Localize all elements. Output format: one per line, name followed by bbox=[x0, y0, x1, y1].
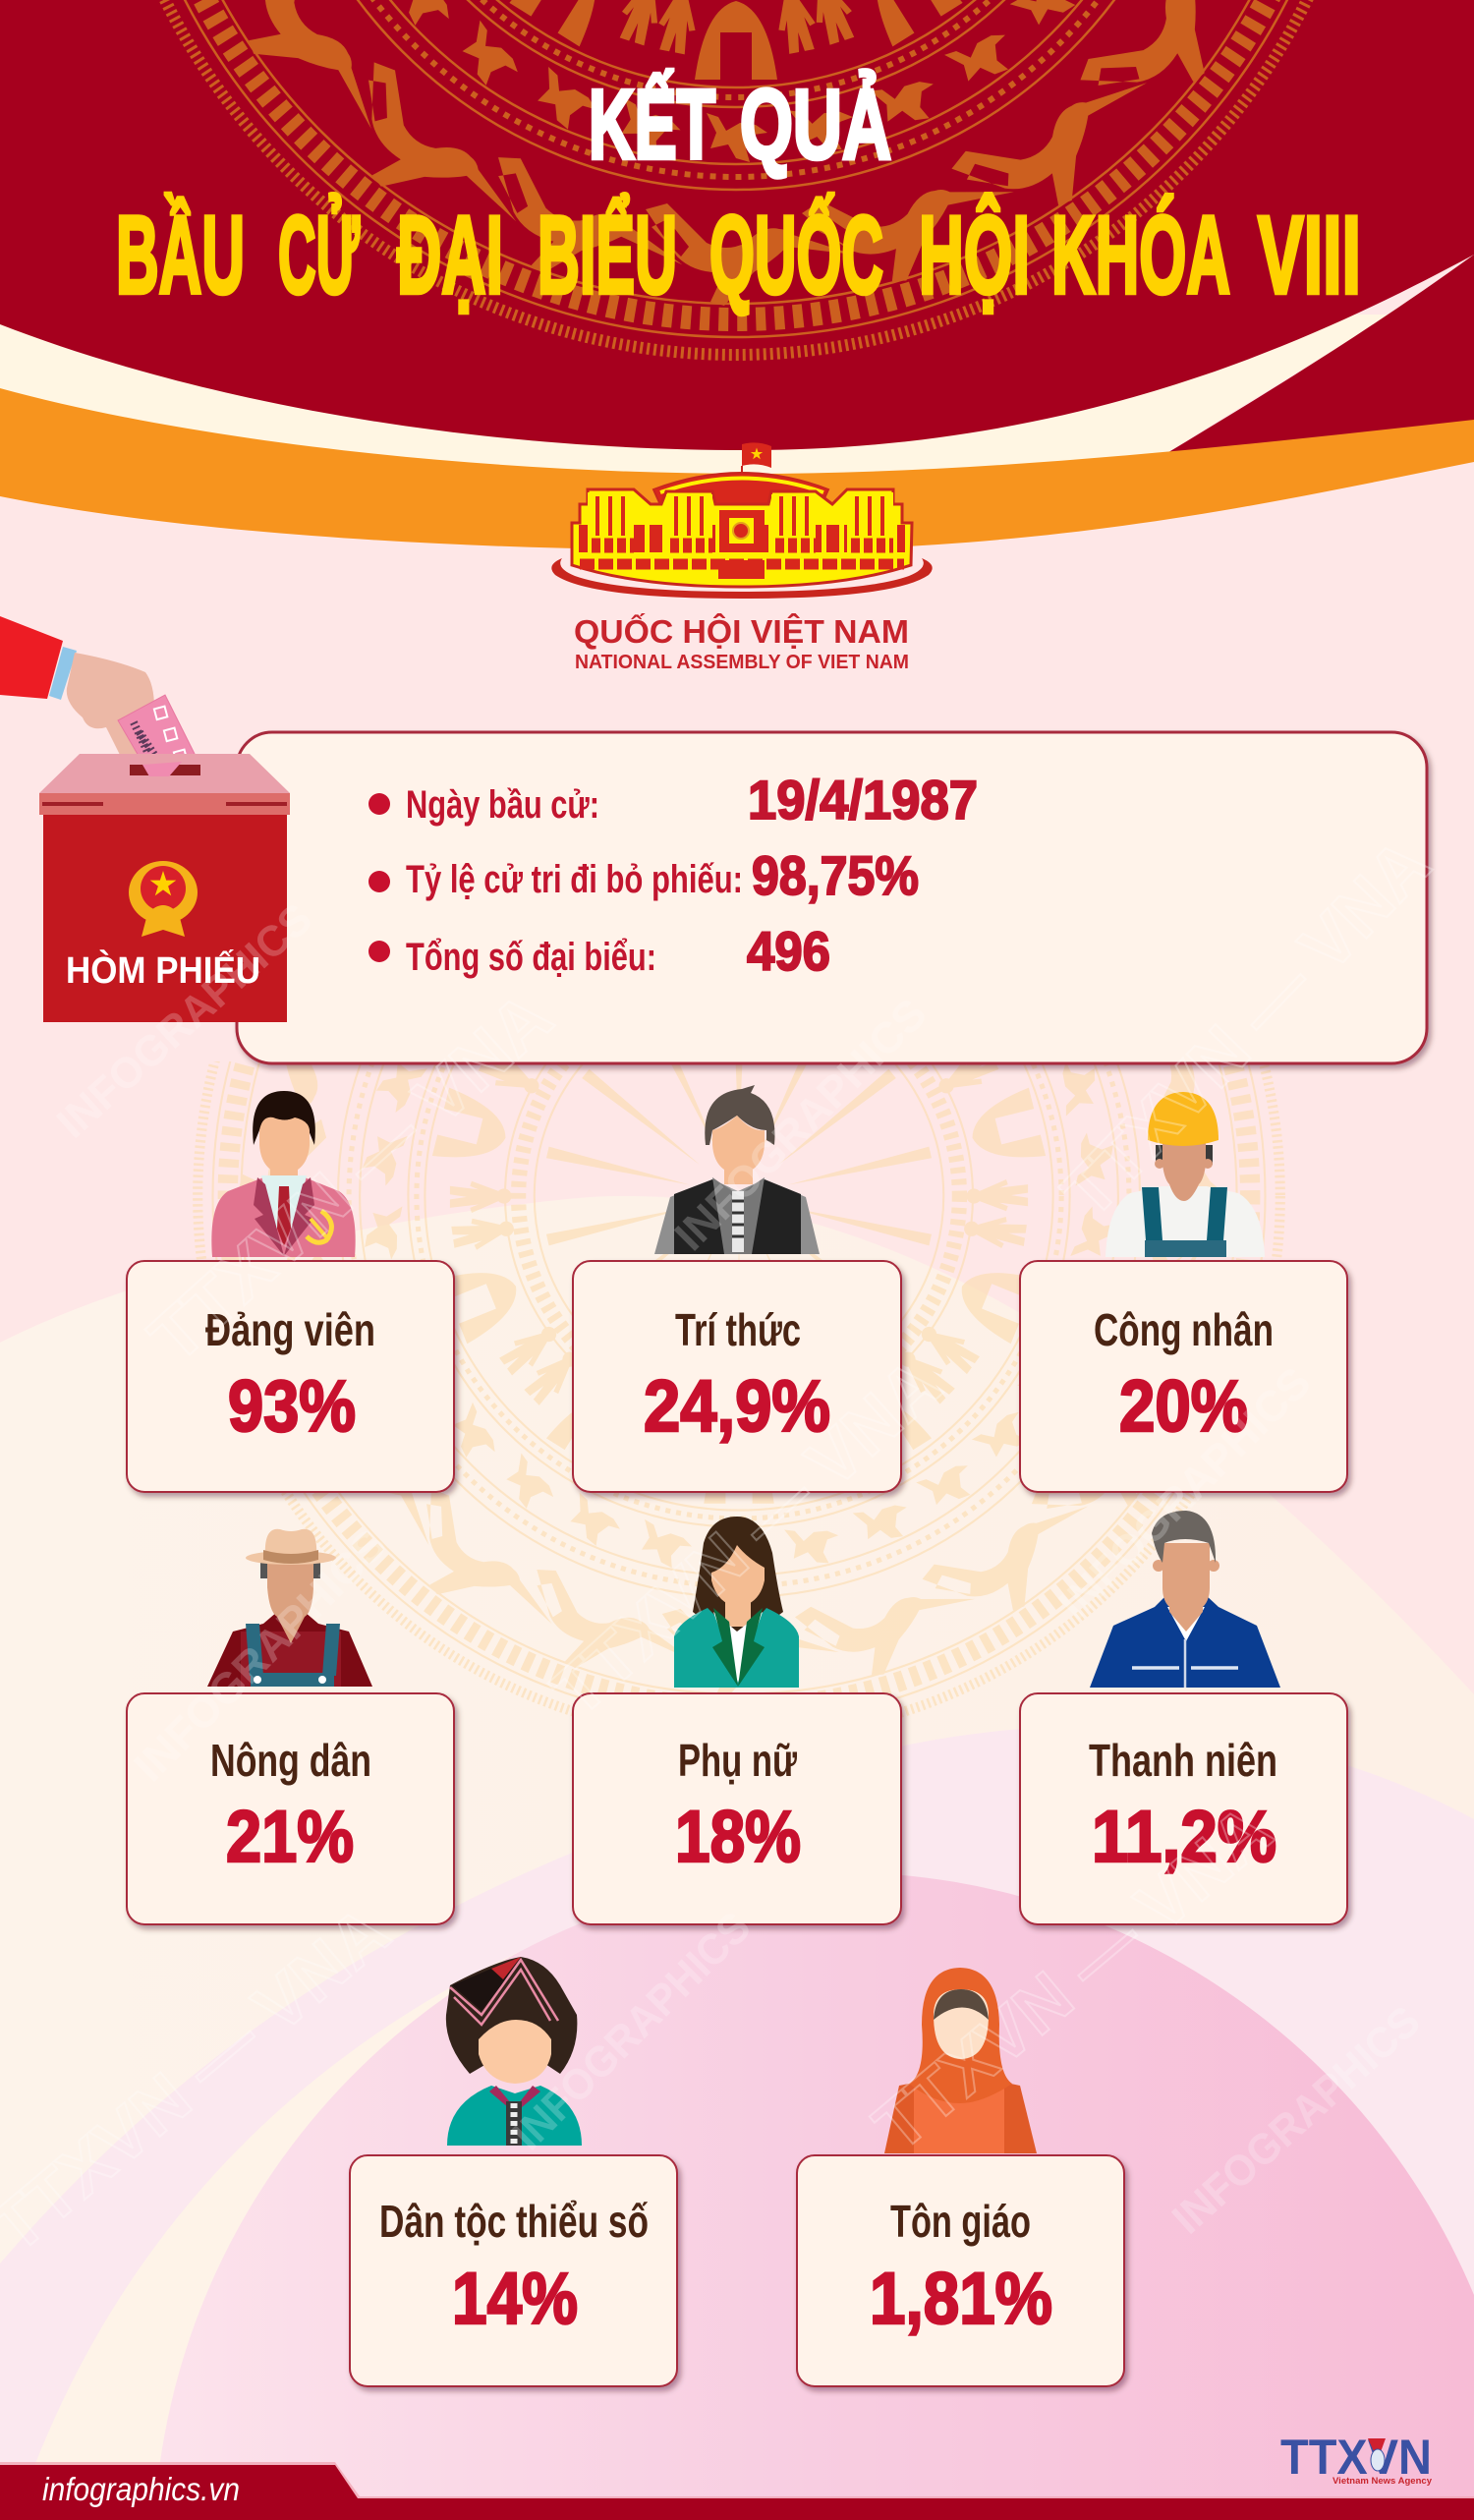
bullet list: election date: Ngày bầu cử: bbox=[406, 783, 599, 827]
agency watermarks: TTXVN — VNA bbox=[1048, 825, 1446, 1232]
bullet list: delegates: 496 bbox=[747, 920, 830, 982]
agency watermarks: INFOGRAPHICS bbox=[125, 1520, 395, 1791]
card: ethnic minorities: Dân tộc thiểu số bbox=[379, 2196, 649, 2247]
National Assembly logo bbox=[551, 442, 933, 673]
icon: assembly building bbox=[551, 473, 933, 599]
title: QUỐC bbox=[709, 194, 883, 316]
card: religion bbox=[797, 2155, 1124, 2386]
card: religion: 1,81% bbox=[870, 2258, 1052, 2339]
figure: party member bbox=[211, 1091, 356, 1257]
title: KẾT bbox=[589, 70, 715, 180]
card: youth bbox=[1020, 1693, 1347, 1924]
header red background with drum bbox=[0, 0, 1474, 450]
agency watermarks bbox=[0, 825, 1446, 2267]
agency watermarks: INFOGRAPHICS bbox=[503, 1903, 760, 2159]
figure: farmer bbox=[207, 1529, 372, 1687]
icon: national emblem bbox=[129, 861, 198, 937]
title: QUẢ bbox=[740, 69, 891, 180]
footer band bbox=[0, 2462, 1474, 2520]
title: CỬ bbox=[278, 194, 360, 316]
title: ĐẠI bbox=[397, 194, 503, 316]
icon: ballot box bbox=[39, 754, 290, 1022]
title: VIII bbox=[1258, 194, 1361, 316]
header swoosh: orange band bbox=[0, 388, 1474, 550]
header swoosh: cream band bbox=[0, 255, 1474, 511]
logo text: QUỐC HỘI VIỆT NAM bbox=[574, 612, 909, 650]
figure: religious follower bbox=[884, 1968, 1037, 2153]
bullet list: election date: 19/4/1987 bbox=[748, 769, 978, 830]
figure: intellectual bbox=[654, 1085, 820, 1254]
figure: woman bbox=[674, 1517, 799, 1688]
bullet list: turnout bbox=[368, 844, 919, 906]
card: farmers: 21% bbox=[226, 1796, 354, 1877]
TTXVN logo: TTXVN bbox=[1280, 2430, 1432, 2485]
agency watermarks: INFOGRAPHICS bbox=[665, 990, 935, 1260]
agency watermarks: TTXVN — VNA bbox=[135, 977, 567, 1378]
card: party members: Đảng viên bbox=[205, 1304, 375, 1355]
card: women bbox=[573, 1693, 901, 1924]
icon: flag bbox=[741, 442, 771, 474]
agency watermarks: TTXVN — VNA bbox=[538, 1345, 955, 1732]
agency watermarks: INFOGRAPHICS bbox=[1049, 1358, 1320, 1629]
ballot box label: HÒM PHIẾU bbox=[66, 948, 260, 992]
agency watermarks: TTXVN — VNA bbox=[860, 1791, 1286, 2166]
card: intellectuals: Trí thức bbox=[675, 1304, 801, 1355]
card: party members: 93% bbox=[228, 1365, 356, 1447]
card: intellectuals bbox=[573, 1261, 901, 1492]
card: farmers: Nông dân bbox=[210, 1735, 371, 1786]
bullet list: turnout: 98,75% bbox=[752, 844, 919, 906]
agency watermarks: INFOGRAPHICS bbox=[48, 894, 321, 1147]
bullet list: delegates: Tổng số đại biểu: bbox=[406, 936, 656, 979]
card: ethnic minorities bbox=[350, 2155, 677, 2386]
logo text bbox=[574, 612, 909, 673]
footer site name: infographics.vn bbox=[42, 2471, 240, 2507]
icon: hand with ballot bbox=[0, 616, 198, 776]
title: BẦU bbox=[116, 194, 245, 316]
card: party members bbox=[127, 1261, 454, 1492]
figure: ethnic minority bbox=[446, 1957, 582, 2146]
title: HỘI bbox=[919, 194, 1030, 316]
card: intellectuals: 24,9% bbox=[644, 1365, 830, 1447]
figure: youth bbox=[1090, 1511, 1280, 1688]
bullet list: turnout: Tỷ lệ cử tri đi bỏ phiếu: bbox=[406, 858, 743, 901]
title bbox=[116, 69, 1361, 316]
card: workers: 20% bbox=[1119, 1365, 1248, 1447]
card: farmers bbox=[127, 1693, 454, 1924]
title: BIỂU bbox=[538, 194, 677, 316]
title: KHÓA bbox=[1051, 194, 1230, 316]
figure: worker bbox=[1106, 1092, 1265, 1257]
info panel bbox=[237, 732, 1427, 1063]
card: women: 18% bbox=[675, 1796, 801, 1877]
logo text: NATIONAL ASSEMBLY OF VIET NAM bbox=[575, 652, 909, 673]
agency watermarks: INFOGRAPHICS bbox=[1163, 1997, 1429, 2243]
card: ethnic minorities: 14% bbox=[452, 2258, 578, 2339]
bullet list: election date bbox=[368, 769, 978, 830]
TTXVN logo: Vietnam News Agency bbox=[1332, 2476, 1432, 2486]
card: religion: Tôn giáo bbox=[890, 2196, 1031, 2247]
header swoosh: red wedge at right bbox=[1165, 255, 1474, 454]
card: women: Phụ nữ bbox=[678, 1735, 798, 1786]
bullet list: delegates bbox=[368, 920, 830, 982]
card: youth: 11,2% bbox=[1092, 1796, 1276, 1877]
card: workers bbox=[1020, 1261, 1347, 1492]
card: youth: Thanh niên bbox=[1089, 1735, 1277, 1786]
card: workers: Công nhân bbox=[1094, 1304, 1274, 1355]
bronze drum watermark bbox=[193, 1061, 1285, 1718]
